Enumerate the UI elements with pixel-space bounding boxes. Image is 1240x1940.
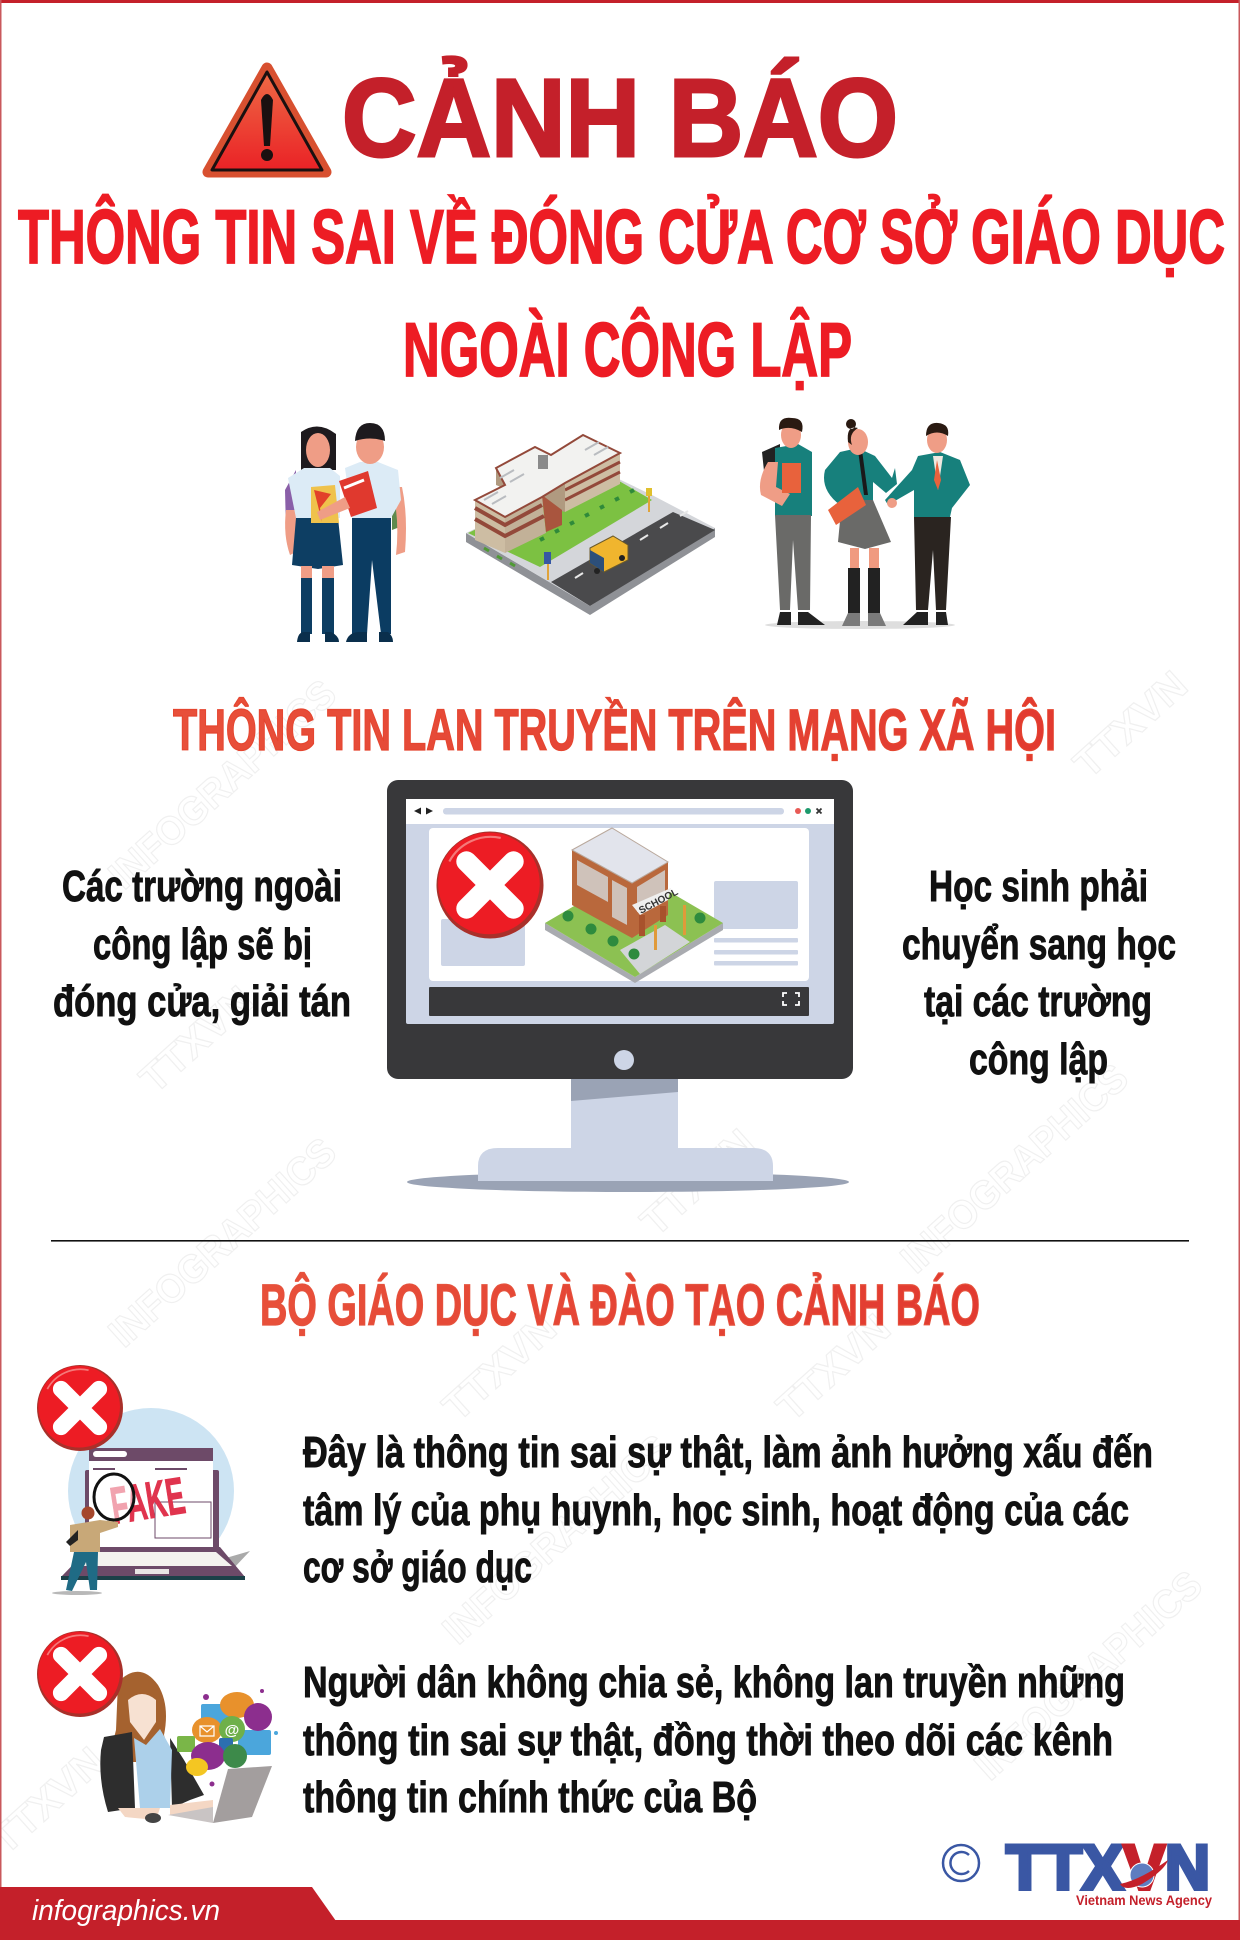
illustration: fake news laptop <box>52 1408 250 1595</box>
text block: left claim: đóng cửa, giải tán <box>53 977 351 1026</box>
text: INFOGRAPHICS <box>435 1427 679 1653</box>
title line 3: NGOÀI CÔNG LẬP <box>403 307 852 393</box>
text: TTXVN <box>633 1121 763 1245</box>
icon: red X first <box>37 1365 123 1451</box>
text block: left claim: công lập sẽ bị <box>93 920 312 969</box>
text: TTXVN <box>1066 663 1196 787</box>
title: CẢNH BÁO: CẢNH BÁO <box>342 57 898 180</box>
text block: warning one: cơ sở giáo dục <box>303 1543 532 1592</box>
text block: warning two: thông tin chính thức của Bộ <box>303 1773 757 1822</box>
text block: left claim: Các trường ngoài <box>62 862 342 911</box>
text: TTXVN <box>435 1306 565 1430</box>
icon: red X second <box>37 1631 123 1717</box>
fake label: FAKE <box>107 1467 189 1536</box>
logo: TTXVN Vietnam News Agency: TTXVN <box>1006 1833 1210 1903</box>
footer website: infographics.vn <box>32 1895 220 1927</box>
text block: right claim <box>902 862 1176 1084</box>
text: INFOGRAPHICS <box>559 771 803 997</box>
text block: right claim: Học sinh phải <box>929 862 1148 911</box>
text block: left claim <box>53 862 351 1026</box>
text: TTXVN <box>769 1306 899 1430</box>
isometric school building <box>545 828 723 983</box>
illustration: isometric school with road and bus <box>466 435 715 615</box>
text: INFOGRAPHICS <box>101 672 345 898</box>
monitor body <box>387 780 853 1079</box>
icon: red X on screen <box>436 832 544 938</box>
logo: TTXVN Vietnam News Agency: Vietnam News Agency <box>1076 1892 1212 1908</box>
icon: warning triangle <box>208 68 326 172</box>
illustration: two students in uniform <box>285 423 406 642</box>
text: INFOGRAPHICS <box>101 1130 345 1356</box>
monitor stand <box>407 1079 849 1192</box>
text: TTXVN <box>132 978 262 1102</box>
text block: warning two <box>303 1658 1125 1822</box>
text: INFOGRAPHICS <box>967 1563 1211 1789</box>
footer bar <box>0 1887 1240 1940</box>
social media icons <box>177 1689 278 1786</box>
illustration: desktop monitor with closed school <box>387 780 853 1192</box>
illustration: three students talking <box>760 418 970 629</box>
browser bar <box>406 799 834 824</box>
text block: right claim: công lập <box>969 1035 1108 1084</box>
social media icons: @ <box>225 1722 239 1739</box>
text block: right claim: tại các trường <box>924 977 1152 1026</box>
illustration: woman using laptop with social icons <box>100 1672 278 1823</box>
text: INFOGRAPHICS <box>893 1056 1137 1282</box>
isometric school building: SCHOOL <box>637 887 680 917</box>
text block: warning one <box>303 1428 1153 1592</box>
